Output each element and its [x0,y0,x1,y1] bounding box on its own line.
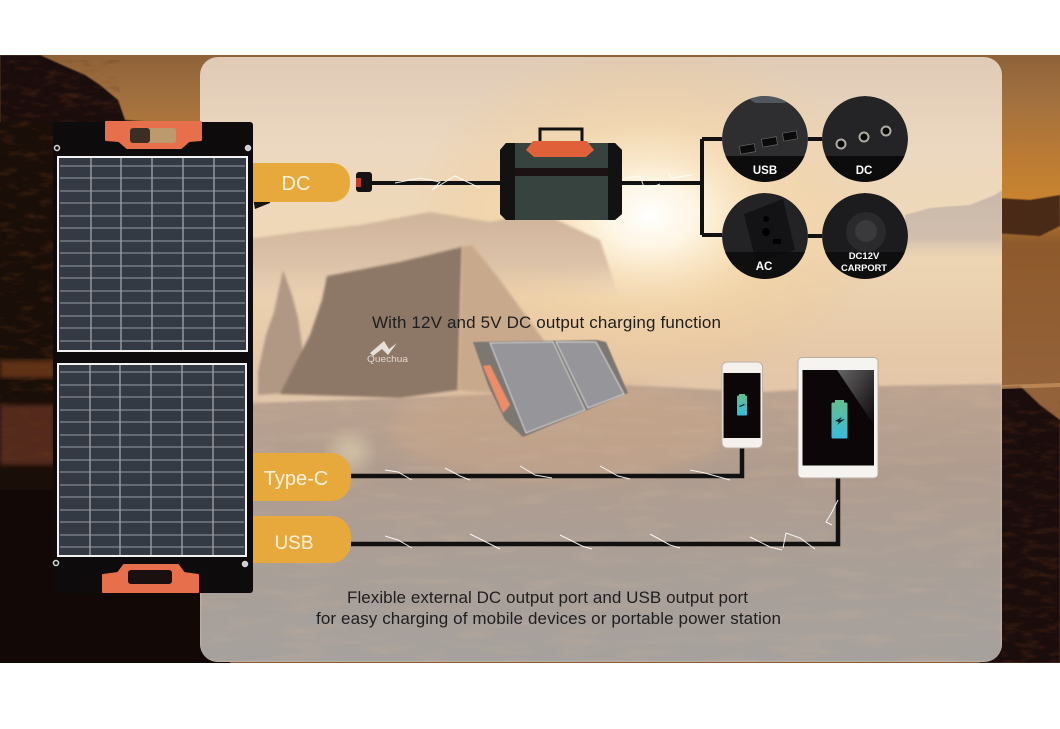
buckle strap [253,194,270,209]
output detail: USB: USB [753,165,777,177]
bottom carry handle [103,565,198,592]
handle [540,129,582,145]
translucent rounded panel [200,45,1002,662]
output detail: USB [722,96,808,182]
orange top grip [526,141,594,157]
label: USB [253,516,351,563]
tree [258,270,306,395]
label: USB: USB [274,533,314,554]
caption: flexible output ports: for easy charging of mobile devices or portable power station [316,609,781,628]
cable: panel to power station and outputs [370,139,822,236]
output detail: AC [722,193,808,280]
body [500,143,622,220]
side bumpers [500,143,622,220]
top carry handle [106,122,201,148]
output detail: DC [822,96,908,182]
tablet battery icon [832,400,848,438]
tablet [798,358,878,478]
label: Type-C: Type-C [264,468,328,490]
caption: flexible output ports [316,588,781,628]
caption: flexible output ports: Flexible external DC output port and USB output port [347,588,748,607]
phone screen [724,373,760,438]
Type-C cable to phone [351,448,742,476]
tablet screen gloss [837,370,874,425]
grommets [54,146,250,566]
solar panel product [53,122,270,593]
tent lit side [458,245,545,395]
portable power station [500,129,622,220]
small folded solar panel in the photo [473,340,628,437]
caption: DC output: With 12V and 5V DC output charging function [372,313,721,332]
output detail: DC: DC [856,165,872,177]
output detail: DC12V carport: CARPORT [841,263,887,274]
output detail: DC12V carport: DC12V [849,251,880,262]
label: Type-C [253,453,351,501]
phone battery icon [737,394,747,416]
centre stripe [515,168,608,176]
tablet screen [802,370,874,466]
electric sparks on lower cables [385,466,838,550]
upper solar module [58,157,247,351]
electric sparks on DC cable [395,173,692,190]
lower solar module [58,364,246,556]
distant mountains [253,212,614,286]
smartphone [722,362,762,448]
label: DC: DC [282,173,310,195]
tent brand label: Quechua [367,354,409,365]
output detail: DC12V carport [822,193,908,280]
panel frame [53,122,253,593]
ground [200,384,1002,662]
label: DC [253,163,350,202]
DC connector plug [356,172,372,192]
USB cable to tablet [351,478,838,544]
output detail: AC: AC [756,261,772,273]
tent brand label [367,341,409,365]
tent [280,247,462,398]
sun glow [450,75,850,302]
